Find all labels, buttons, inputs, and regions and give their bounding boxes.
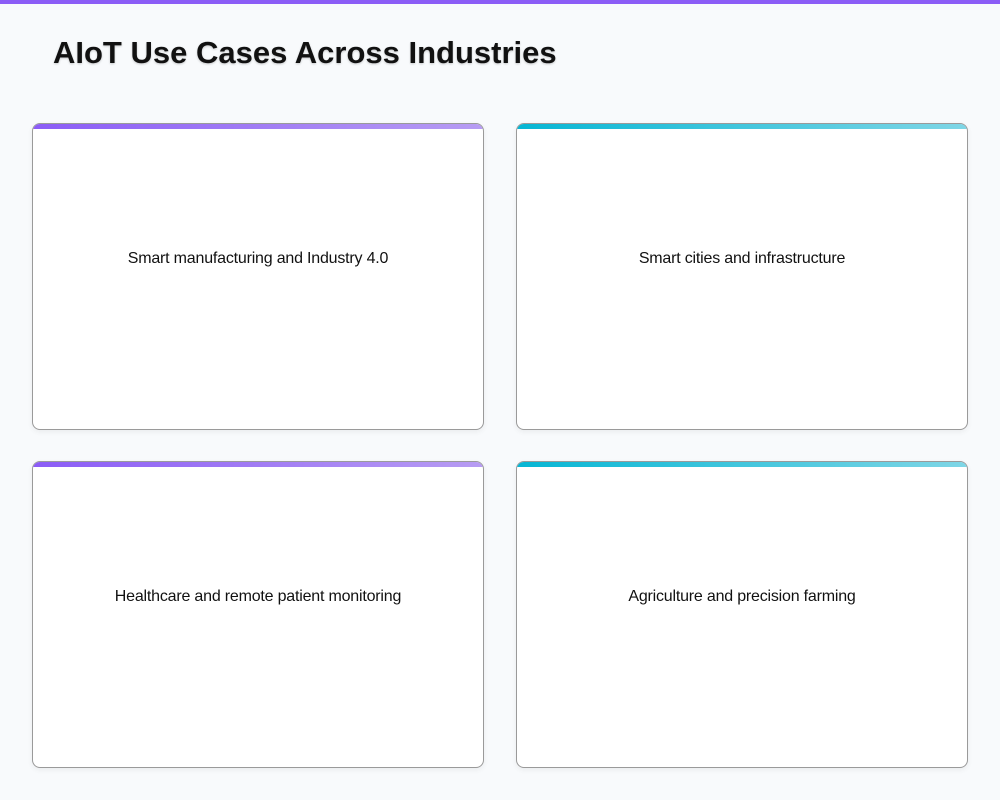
top accent bar [0, 0, 1000, 4]
panel: manufacturing [32, 123, 484, 430]
panel: smart cities: Smart cities and infrastructure [639, 250, 845, 266]
panel: smart cities [516, 123, 968, 430]
panel: agriculture: Agriculture and precision farming [628, 588, 856, 604]
panel: healthcare: Healthcare and remote patient monitoring [115, 588, 401, 604]
panel: agriculture [516, 461, 968, 768]
title: AIoT Use Cases Across Industries [53, 35, 557, 70]
panel: manufacturing: Smart manufacturing and Industry 4.0 [128, 250, 388, 266]
panel: healthcare [32, 461, 484, 768]
